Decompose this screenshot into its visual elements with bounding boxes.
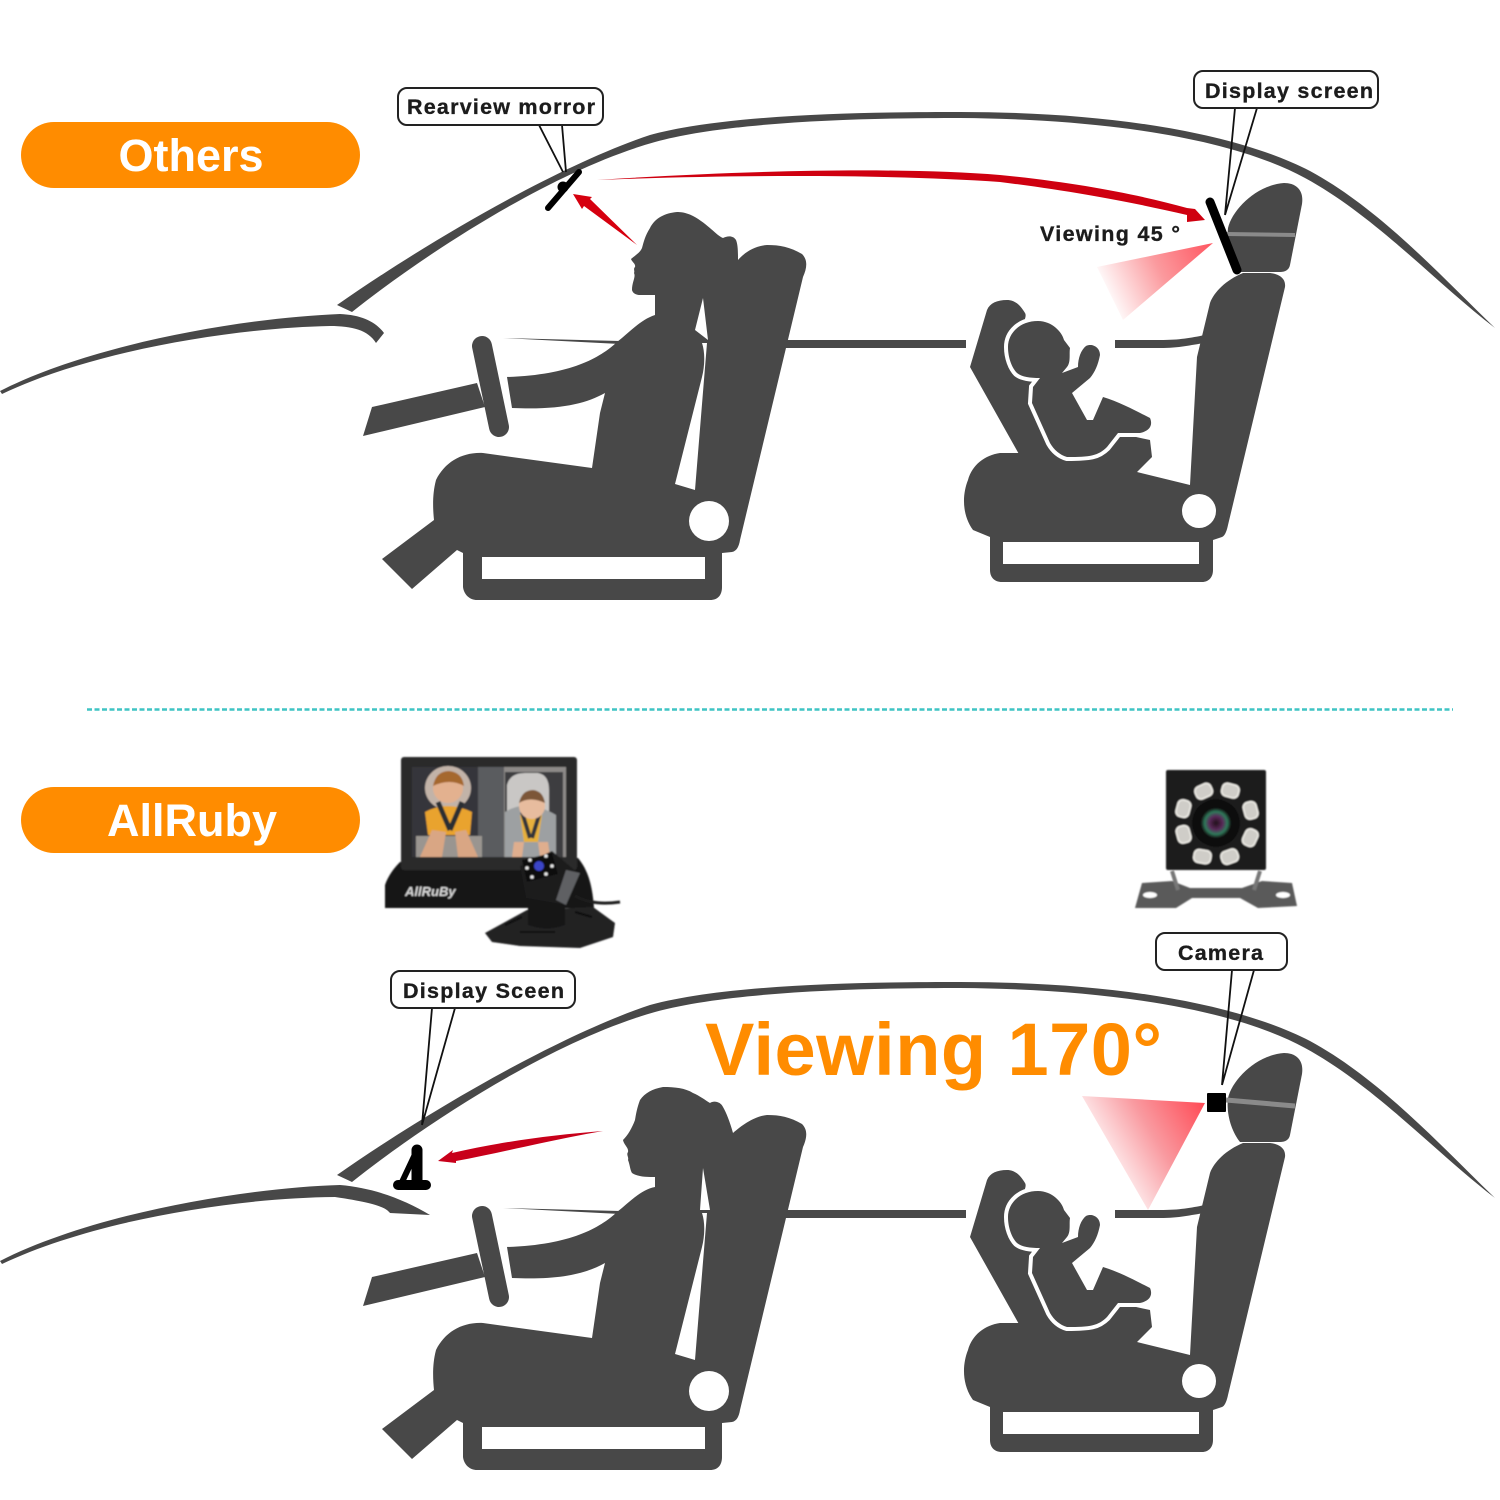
product photo: monitor and camera	[385, 757, 620, 948]
child seat and baby	[970, 300, 1151, 470]
display screen on headrest	[1210, 202, 1237, 270]
callout: Rearview morror	[398, 88, 603, 172]
badge: Others	[21, 122, 360, 188]
driver and front seat silhouette	[382, 1087, 806, 1470]
panel: AllRuby comparison	[0, 757, 1495, 1470]
product photo: monitor and camera: AllRuBy	[404, 884, 456, 899]
product photo: backup camera	[1135, 770, 1297, 908]
arrow: driver to mirror	[573, 194, 637, 245]
car outline: roof	[337, 982, 1495, 1198]
divider: dashed	[87, 708, 1453, 711]
viewing cone 45	[1097, 243, 1213, 320]
panel: others comparison	[0, 71, 1495, 600]
rearview mirror	[548, 172, 579, 208]
rear seat with headrest	[964, 1053, 1302, 1452]
callout: Display screen	[1194, 71, 1378, 215]
steering wheel and column	[363, 346, 499, 436]
badge: AllRuby: AllRuby	[107, 795, 277, 846]
arrow: driver to display	[438, 1131, 603, 1163]
badge: Others: Others	[118, 130, 264, 181]
viewing cone 170	[1082, 1096, 1205, 1210]
car outline: roof	[337, 112, 1495, 328]
steering wheel and column	[363, 1216, 499, 1306]
callout: Rearview morror: Rearview morror	[407, 95, 596, 119]
camera on headrest	[1207, 1093, 1226, 1112]
driver and front seat silhouette	[382, 212, 806, 600]
beltline	[503, 335, 1205, 348]
car outline: hood	[0, 314, 384, 394]
badge: AllRuby	[21, 787, 360, 853]
callout: Display Sceen	[391, 971, 575, 1125]
callout: Display screen: Display screen	[1205, 79, 1373, 103]
heading: Viewing 170: Viewing 170°	[705, 1008, 1162, 1091]
arrow: mirror to display screen	[597, 170, 1205, 222]
display screen stand	[393, 1148, 431, 1190]
label: Viewing 45: Viewing 45 °	[1040, 222, 1180, 246]
beltline	[503, 1205, 1205, 1218]
rear seat with headrest	[964, 183, 1302, 582]
child seat and baby	[970, 1170, 1151, 1340]
callout: Camera: Camera	[1178, 941, 1264, 965]
callout: Camera	[1156, 933, 1287, 1085]
callout: Display Sceen: Display Sceen	[403, 979, 564, 1003]
car outline: hood	[0, 1185, 430, 1264]
